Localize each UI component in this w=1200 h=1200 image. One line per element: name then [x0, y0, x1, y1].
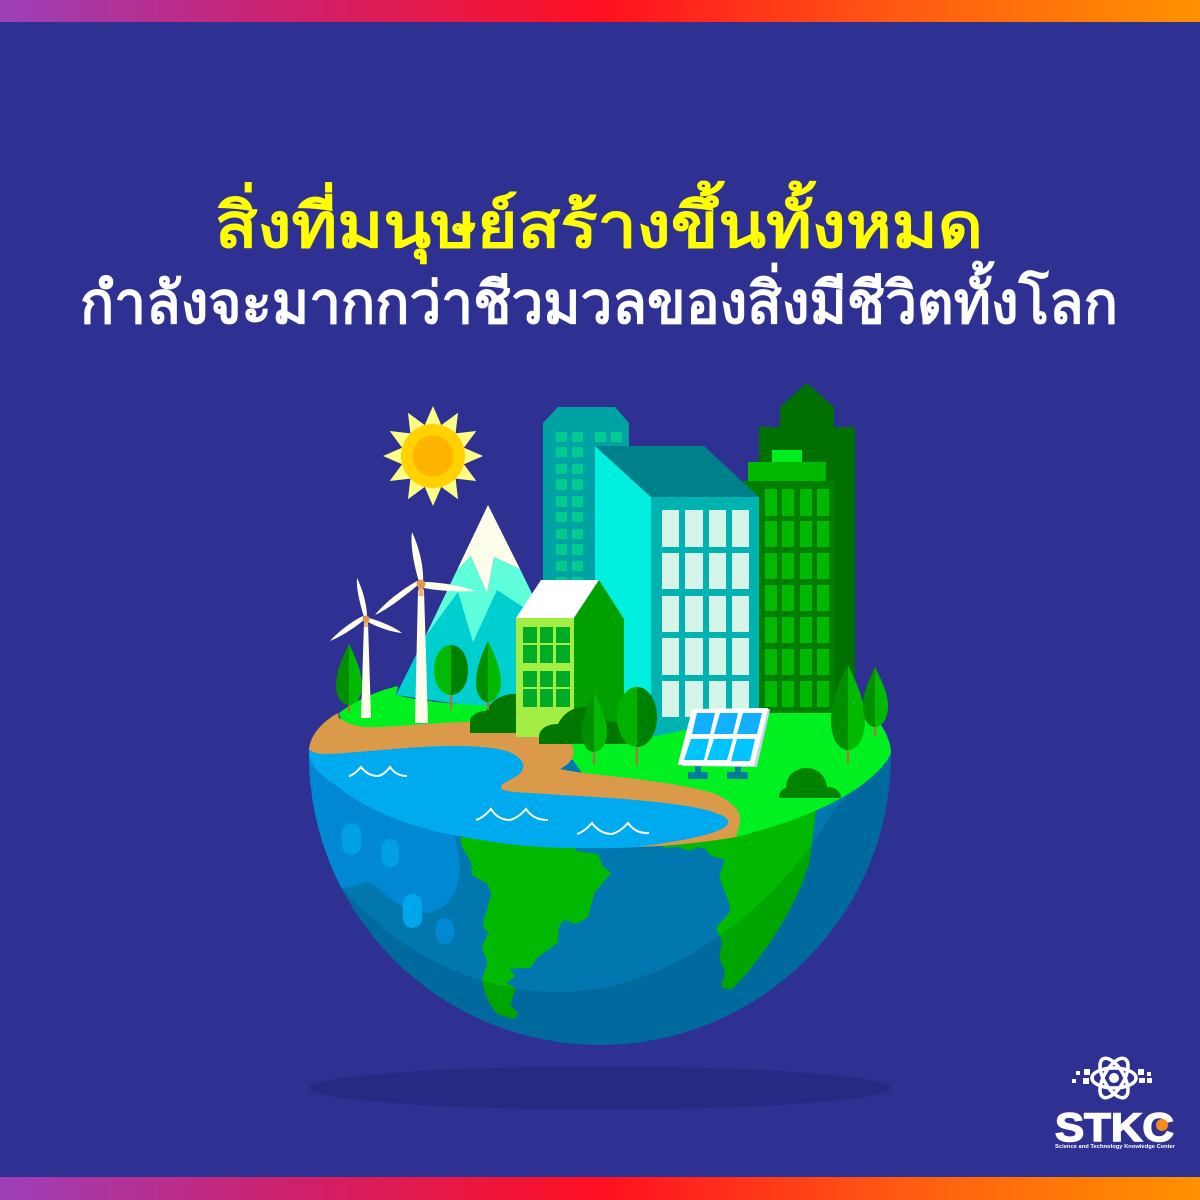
tree 7 — [863, 667, 888, 736]
icon: data dots — [1072, 1069, 1152, 1084]
bush right — [779, 768, 841, 798]
logo wordmark: STKC — [1055, 1106, 1174, 1150]
dark green tower — [743, 383, 855, 715]
globe shadow — [309, 1066, 891, 1110]
tree 2 round — [434, 645, 468, 710]
icon: sun — [383, 406, 483, 506]
ocean highlight pills — [342, 823, 454, 944]
cyan office building — [595, 446, 759, 740]
trees — [336, 641, 888, 766]
icon: orange dot — [1156, 1119, 1168, 1131]
tree 4 — [582, 692, 607, 764]
globe body — [300, 740, 900, 1050]
wind turbine: large — [375, 532, 476, 723]
illustration: half globe with city — [300, 383, 900, 1050]
lighter ocean band — [309, 760, 850, 992]
bush left — [470, 694, 530, 733]
tree 5 round — [617, 687, 657, 766]
title line 2: กำลังจะมากกว่าชีวมวลของสิ่งมีชีวิตทั้งโลก — [80, 261, 1118, 336]
logo tagline: Science and Technology Knowledge Center — [1055, 1144, 1176, 1150]
title line 1: สิ่งที่มนุษย์สร้างขึ้นทั้งหมด — [215, 180, 983, 264]
land surface: grass — [339, 686, 891, 837]
green house — [516, 580, 624, 737]
land surface: water — [309, 746, 728, 848]
mountain — [396, 505, 560, 720]
bottom gradient bar — [0, 1177, 1200, 1200]
logo: STKC — [1055, 1054, 1176, 1150]
solar panel — [679, 709, 769, 779]
tree 3 — [476, 641, 501, 710]
wind turbine: small — [330, 578, 402, 718]
bush centre — [539, 707, 630, 744]
bright ocean patch — [300, 745, 460, 913]
tree 1 — [336, 644, 362, 713]
top gradient bar — [0, 0, 1200, 22]
title — [80, 180, 1118, 336]
icon: atom — [1092, 1054, 1136, 1102]
land surface: sand path — [309, 713, 740, 847]
waves — [349, 767, 649, 834]
tree 6 — [831, 665, 865, 763]
back teal tower — [543, 407, 629, 600]
land: Africa — [664, 810, 815, 989]
land: South America — [461, 838, 610, 1018]
